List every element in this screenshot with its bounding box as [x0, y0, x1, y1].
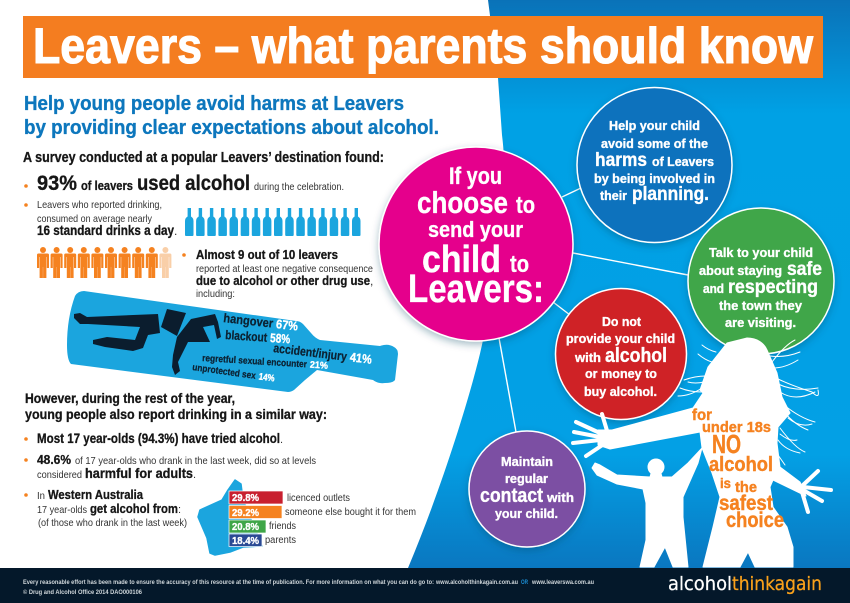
stat: 48.6% harmful levels: 48.6% — [37, 452, 71, 467]
circle: blue, harms of Leavers: avoid some of the — [601, 136, 708, 151]
stat: 93% used alcohol: used alcohol — [137, 172, 250, 195]
circle: blue, harms of Leavers: Help your child — [609, 118, 700, 133]
stat: 16 standard drinks: Leavers who reported drinking, — [37, 199, 162, 211]
stat: 93% used alcohol: 93% — [37, 172, 77, 195]
circle: green, staying safe — [688, 208, 834, 354]
circle: green, staying safe: respecting — [728, 277, 818, 298]
bottle chart: negative consequences: hangover — [223, 311, 274, 331]
footer disclaimer: © Drug and Alcohol Office 2014 DAO000106 — [23, 588, 142, 596]
stat: 93% used alcohol — [24, 172, 344, 195]
stat: 48.6% harmful levels — [24, 452, 316, 481]
silhouette: young woman with message: alcohol — [709, 454, 773, 476]
silhouette: young woman with message: for — [692, 407, 712, 424]
silhouette: young woman with message: is — [720, 475, 731, 491]
circle: purple, regular contact: with — [546, 490, 574, 505]
circle: magenta, if you choose: Leavers: — [408, 267, 544, 311]
bar chart: alcohol sources: 20.8% — [232, 521, 260, 533]
circle: purple, regular contact: your child. — [495, 506, 558, 521]
map: Western Australia — [198, 480, 262, 555]
stat: 9 out of 10 leavers — [182, 247, 373, 300]
stat: 94.3% tried alcohol: . — [280, 434, 283, 446]
bar chart: alcohol sources: someone else bought it for them — [285, 507, 416, 518]
survey heading: A survey conducted at a popular Leavers’ destination found: — [23, 150, 384, 166]
circle: green, staying safe: the town they — [719, 298, 803, 313]
logo: alcohol think again: alcohol — [668, 573, 732, 595]
circle: purple, regular contact — [469, 431, 585, 547]
stat: 9 out of 10 leavers: due to alcohol or other drug use — [196, 273, 370, 288]
stat: Western Australia sources: : — [178, 504, 181, 516]
circle: blue, harms of Leavers: by being involved in — [594, 171, 715, 186]
bottle chart: negative consequences: unprotected sex — [192, 362, 257, 382]
circle: purple, regular contact: contact — [480, 485, 543, 507]
hair strands — [678, 340, 818, 465]
circle: purple, regular contact: regular — [505, 471, 548, 486]
stat: Western Australia sources: 17 year-olds — [37, 504, 87, 516]
silhouette: young woman with message — [573, 338, 831, 567]
bar chart: alcohol sources: 18.4% — [232, 535, 260, 547]
circle: red, do not provide alcohol: Do not — [602, 314, 642, 329]
stat: Western Australia sources — [24, 487, 187, 529]
footer disclaimer: www.alcoholthinkagain.com.au — [435, 579, 518, 586]
stat: 9 out of 10 leavers: reported at least one negative consequence — [196, 264, 373, 275]
bottle chart: negative consequences: 14% — [258, 371, 276, 385]
circle: magenta, if you choose: choose — [417, 185, 508, 220]
stat: 16 standard drinks — [24, 199, 177, 238]
footer disclaimer: www.leaverswa.com.au — [531, 579, 594, 586]
icon: collapsed figure — [74, 309, 221, 375]
section heading: rest of the year — [25, 390, 327, 422]
circle: blue, harms of Leavers: harms — [595, 150, 647, 171]
circle: red, do not provide alcohol: alcohol — [605, 345, 667, 367]
bottle chart: negative consequences: 67% — [275, 317, 299, 333]
stat: 9 out of 10 leavers: Almost 9 out of 10 leavers — [196, 247, 338, 262]
stat: 48.6% harmful levels: considered — [37, 469, 82, 481]
circle: red, do not provide alcohol: buy alcohol. — [584, 384, 657, 399]
circle: blue, harms of Leavers — [577, 88, 732, 242]
circle: magenta, if you choose: to — [516, 192, 535, 219]
circle: magenta, if you choose: child — [422, 239, 501, 281]
circle: green, staying safe: about staying — [699, 263, 782, 278]
icon row: 9 of 10 people — [37, 247, 171, 278]
circle: magenta, if you choose: to — [510, 251, 529, 278]
circle: red, do not provide alcohol — [556, 288, 686, 420]
stat: 93% used alcohol: during the celebration. — [254, 182, 344, 193]
stat: 16 standard drinks: 16 standard drinks a day — [37, 223, 174, 238]
bar chart: alcohol sources: 29.8% — [232, 492, 260, 504]
footer disclaimer: OR — [521, 579, 528, 586]
subheading — [24, 93, 439, 139]
section heading: rest of the year: However, during the rest of the year, — [25, 390, 235, 406]
circle: green, staying safe: are visiting. — [725, 315, 796, 330]
bottle chart: negative consequences: regretful sexual encounter — [202, 353, 308, 370]
circle: red, do not provide alcohol: or money to — [585, 366, 657, 381]
silhouette: young woman with message: NO — [712, 429, 741, 459]
bottle chart: negative consequences: blackout — [225, 328, 268, 345]
stat: 94.3% tried alcohol: Most 17 year-olds (94.3%) have tried alcohol — [37, 430, 280, 446]
circle: blue, harms of Leavers: planning. — [632, 184, 709, 205]
circle: green, staying safe: and — [703, 281, 724, 296]
footer disclaimer — [23, 579, 594, 596]
subheading: Help young people avoid harms at Leavers — [24, 93, 404, 115]
circle: magenta, if you choose: If you — [449, 163, 502, 190]
stat: Western Australia sources: In — [37, 490, 45, 502]
icon row: 16 bottles — [185, 208, 360, 236]
logo: alcohol think again — [668, 573, 822, 595]
fingers — [573, 414, 831, 512]
circle: magenta, if you choose: send your — [428, 217, 523, 242]
bottle chart: negative consequences: accident/injury — [273, 341, 348, 364]
stat: Western Australia sources: (of those who drank in the last week) — [38, 518, 187, 529]
blue background panel — [408, 0, 850, 568]
stat: 93% used alcohol: of leavers — [81, 178, 133, 193]
silhouette: young woman with message: under 18s — [702, 419, 771, 436]
silhouette: young woman with message: safest — [719, 492, 773, 515]
stat: 48.6% harmful levels: of 17 year-olds who drank in the last week, did so at levels — [75, 455, 316, 467]
circle: magenta, if you choose — [379, 147, 573, 341]
stat: 16 standard drinks: consumed on average nearly — [37, 213, 153, 225]
silhouette: young man — [592, 448, 702, 567]
bar chart: alcohol sources: licenced outlets — [287, 493, 350, 504]
logo: alcohol think again: thinkagain — [732, 573, 822, 595]
connector lines — [499, 188, 688, 432]
bottle chart: negative consequences: 41% — [349, 350, 373, 367]
circle: green, staying safe: Talk to your child — [709, 245, 813, 260]
circle: purple, regular contact: Maintain — [501, 454, 553, 469]
circle: red, do not provide alcohol: with — [574, 350, 601, 365]
subheading: by providing clear expectations about alcohol. — [24, 117, 439, 139]
circle: blue, harms of Leavers: of Leavers — [652, 154, 714, 169]
bar chart: alcohol sources: parents — [265, 535, 296, 546]
bar chart: alcohol sources: 29.2% — [232, 507, 260, 519]
circle: blue, harms of Leavers: their — [600, 188, 627, 203]
silhouette: young woman with message: choice — [726, 509, 784, 532]
stat: 9 out of 10 leavers: , — [370, 274, 373, 288]
stat: Western Australia sources: Western Australia — [48, 487, 144, 502]
footer bar — [0, 568, 850, 603]
stat: 48.6% harmful levels: harmful for adults — [85, 465, 193, 481]
stat: 16 standard drinks: . — [174, 224, 177, 238]
stat: 9 out of 10 leavers: including: — [196, 289, 235, 300]
bottle chart: negative consequences — [67, 291, 398, 392]
footer disclaimer: Every reasonable effort has been made to ensure the accuracy of this resource at the time of publication. For more information on what you can do go to: — [23, 579, 434, 586]
section heading: rest of the year: young people also report drinking in a similar way: — [25, 406, 327, 422]
circle: red, do not provide alcohol: provide your child — [566, 331, 675, 346]
silhouette: young woman with message: the — [735, 479, 757, 496]
bar chart: alcohol sources — [229, 491, 416, 547]
stat: 48.6% harmful levels: . — [193, 469, 196, 481]
bottle chart: negative consequences: 58% — [270, 331, 291, 346]
circle: green, staying safe: safe — [787, 259, 822, 280]
bar chart: alcohol sources: friends — [269, 521, 296, 532]
stat: Western Australia sources: get alcohol from — [90, 501, 178, 516]
bottle chart: negative consequences: 21% — [310, 360, 329, 372]
